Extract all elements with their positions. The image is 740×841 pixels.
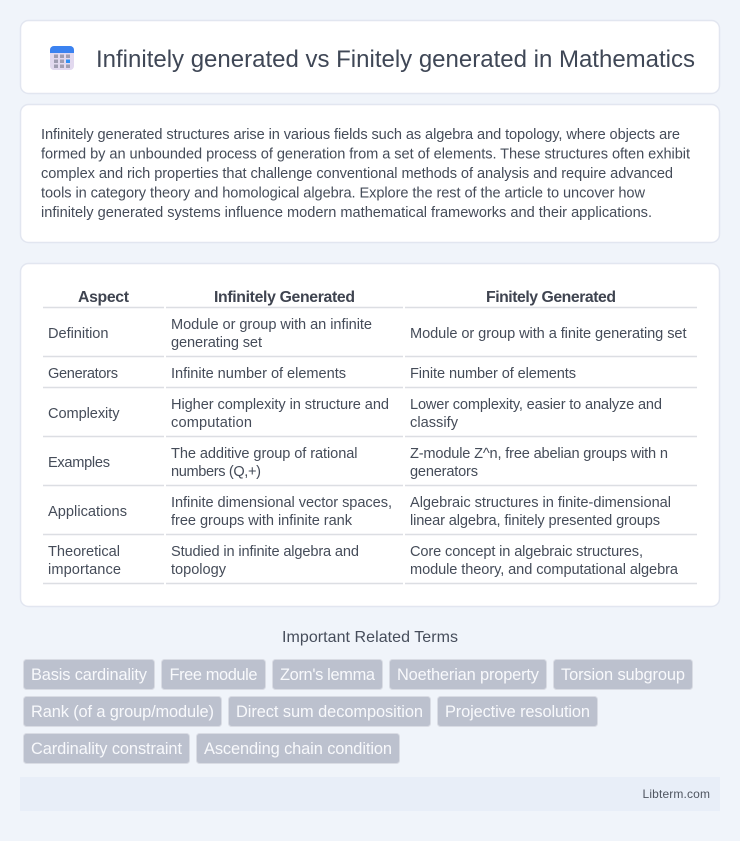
row: theoretical importance: Studied in infinite algebra and xyxy=(171,544,359,560)
related terms heading: Important Related Terms xyxy=(282,629,458,646)
intro text: complex and rich properties that challenge conventional methods of analysis and require advanced xyxy=(41,166,673,182)
tag: projective resolution: Projective resolution xyxy=(445,703,590,721)
tag: cardinality constraint xyxy=(24,734,190,764)
tag: ascending chain condition xyxy=(196,734,400,764)
table header: Infinitely Generated xyxy=(214,289,355,306)
row: examples: Z-module Z^n, free abelian groups with n xyxy=(410,446,668,462)
tag: direct sum decomposition xyxy=(228,696,430,726)
comparison table panel xyxy=(20,264,720,606)
tag: torsion subgroup: Torsion subgroup xyxy=(561,666,685,684)
row: examples: Examples xyxy=(48,455,110,471)
tag: basis cardinality xyxy=(24,660,154,690)
footer xyxy=(20,777,720,811)
intro panel xyxy=(20,104,720,242)
intro text: Infinitely generated structures arise in various fields such as algebra and topology, where objects are xyxy=(41,127,680,143)
row: applications: Applications xyxy=(48,504,127,520)
intro text: formed by an unbounded process of generation from a set of elements. These structures often exhibit xyxy=(41,146,690,162)
intro text xyxy=(41,127,690,221)
row: generators xyxy=(48,366,576,382)
tag: free module: Free module xyxy=(170,666,258,684)
tag: direct sum decomposition: Direct sum decomposition xyxy=(236,703,423,721)
tag: zorn's lemma: Zorn's lemma xyxy=(280,666,376,684)
row: applications: Infinite dimensional vector spaces, xyxy=(171,495,392,511)
row: theoretical importance: topology xyxy=(171,562,227,578)
table header xyxy=(78,289,616,306)
tag: rank: Rank (of a group/module) xyxy=(31,703,214,721)
row: complexity: classify xyxy=(410,415,459,431)
row: applications xyxy=(48,495,671,529)
tag: noetherian property xyxy=(390,660,546,690)
row: applications: Algebraic structures in finite-dimensional xyxy=(410,495,671,511)
row: theoretical importance: importance xyxy=(48,562,121,578)
tag: ascending chain condition: Ascending chain condition xyxy=(204,740,392,758)
table header: Finitely Generated xyxy=(486,289,616,306)
row: definition: generating set xyxy=(171,335,262,351)
icon: calendar xyxy=(50,46,74,70)
row: theoretical importance: Theoretical xyxy=(48,544,120,560)
row: examples: The additive group of rational xyxy=(171,446,358,462)
related terms tags xyxy=(24,660,692,764)
tag: noetherian property: Noetherian property xyxy=(397,666,540,684)
row: definition xyxy=(48,317,686,351)
title: Infinitely generated vs Finitely generated in Mathematics xyxy=(96,46,695,73)
tag: free module xyxy=(162,660,266,690)
row: theoretical importance xyxy=(48,544,679,578)
footer brand: Libterm.com xyxy=(642,787,710,801)
tag: rank xyxy=(24,696,222,726)
row: examples xyxy=(48,446,668,480)
tag: zorn's lemma xyxy=(272,660,382,690)
row: complexity: computation xyxy=(171,415,252,431)
row: definition: Definition xyxy=(48,326,108,342)
tag: projective resolution xyxy=(438,696,598,726)
row: generators: Finite number of elements xyxy=(410,366,576,382)
row: applications: free groups with infinite rank xyxy=(171,513,353,529)
row: complexity: Complexity xyxy=(48,406,120,422)
row: complexity: Lower complexity, easier to analyze and xyxy=(410,397,662,413)
row: applications: linear algebra, finitely presented groups xyxy=(410,513,660,529)
row: generators: Generators xyxy=(48,366,118,382)
header panel xyxy=(20,20,720,94)
row: definition: Module or group with a finite generating set xyxy=(410,326,686,342)
row: complexity: Higher complexity in structure and xyxy=(171,397,389,413)
intro text: tools in category theory and homological algebra. Explore the rest of the article to uncover how xyxy=(41,186,645,202)
row: theoretical importance: Core concept in algebraic structures, xyxy=(410,544,643,560)
tag: cardinality constraint: Cardinality constraint xyxy=(31,740,182,758)
row: examples: numbers (Q,+) xyxy=(171,464,261,480)
row: examples: generators xyxy=(410,464,478,480)
row: complexity xyxy=(48,397,662,431)
tag: torsion subgroup xyxy=(554,660,692,690)
row: definition: Module or group with an infinite xyxy=(171,317,372,333)
intro text: infinitely generated systems influence modern mathematical frameworks and their applications. xyxy=(41,205,652,221)
row: theoretical importance: module theory, and computational algebra xyxy=(410,562,679,578)
table header: Aspect xyxy=(78,289,130,306)
tag: basis cardinality: Basis cardinality xyxy=(31,666,148,684)
row: generators: Infinite number of elements xyxy=(171,366,346,382)
